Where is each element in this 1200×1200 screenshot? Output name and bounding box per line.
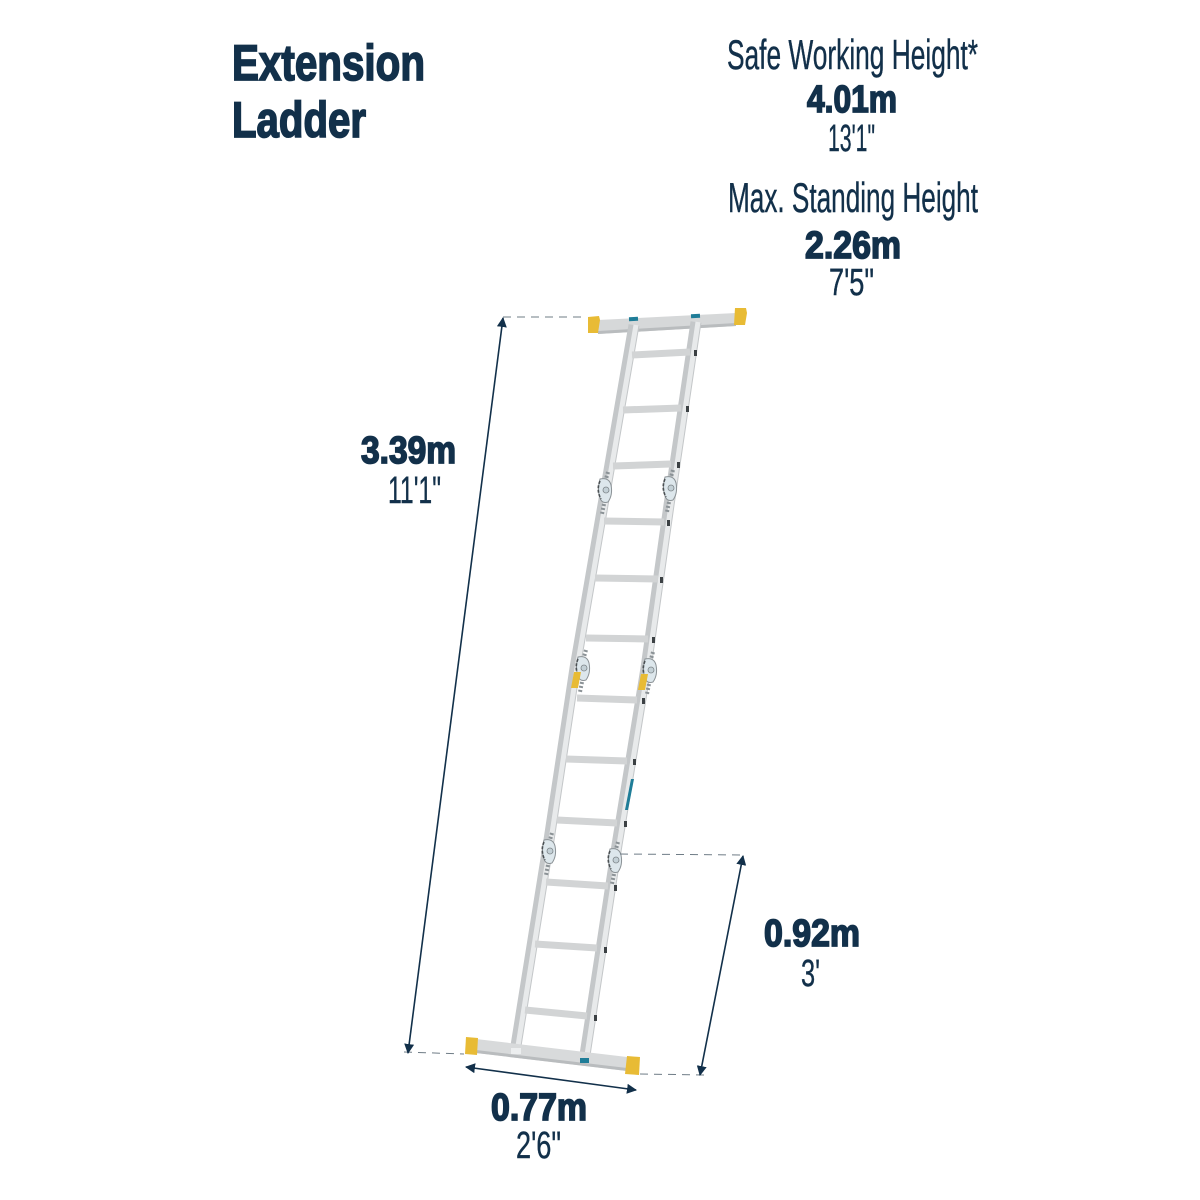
ladder left rail [515,325,636,1052]
bottom stabiliser bar [465,1037,640,1075]
max standing height spec [728,174,978,304]
max standing height spec: 7'5" [829,262,874,304]
title [232,35,425,148]
rail labels [625,779,634,810]
top stabiliser bar [588,308,747,334]
dimension: section length 0.92m [620,854,860,1075]
ladder hinges [542,470,677,884]
max standing height spec: 2.26m [805,225,901,267]
dimension: base width 0.77m [466,1067,636,1167]
dimension: base width 0.77m: 2'6" [516,1125,561,1167]
title: Extension [232,35,425,91]
dimension: section length 0.92m: 3' [801,953,820,995]
dimension: overall length 3.39m: 11'1" [388,470,441,512]
ladder rungs [525,352,690,1016]
yellow hinge locks [571,672,648,690]
ladder illustration [465,308,747,1075]
safe working height spec: Safe Working Height* [727,31,978,78]
rail fixings [594,350,697,1021]
dimension: base width 0.77m: 0.77m [491,1087,587,1129]
max standing height spec: Max. Standing Height [728,174,978,221]
dimension: overall length 3.39m: 3.39m [361,430,456,472]
dimension: section length 0.92m: 0.92m [764,913,860,955]
safe working height spec: 13'1" [828,118,875,160]
title: Ladder [232,92,366,148]
safe working height spec [727,31,978,160]
safe working height spec: 4.01m [807,79,897,121]
ladder right rail [585,322,698,1055]
dimension: overall length 3.39m [361,317,586,1054]
